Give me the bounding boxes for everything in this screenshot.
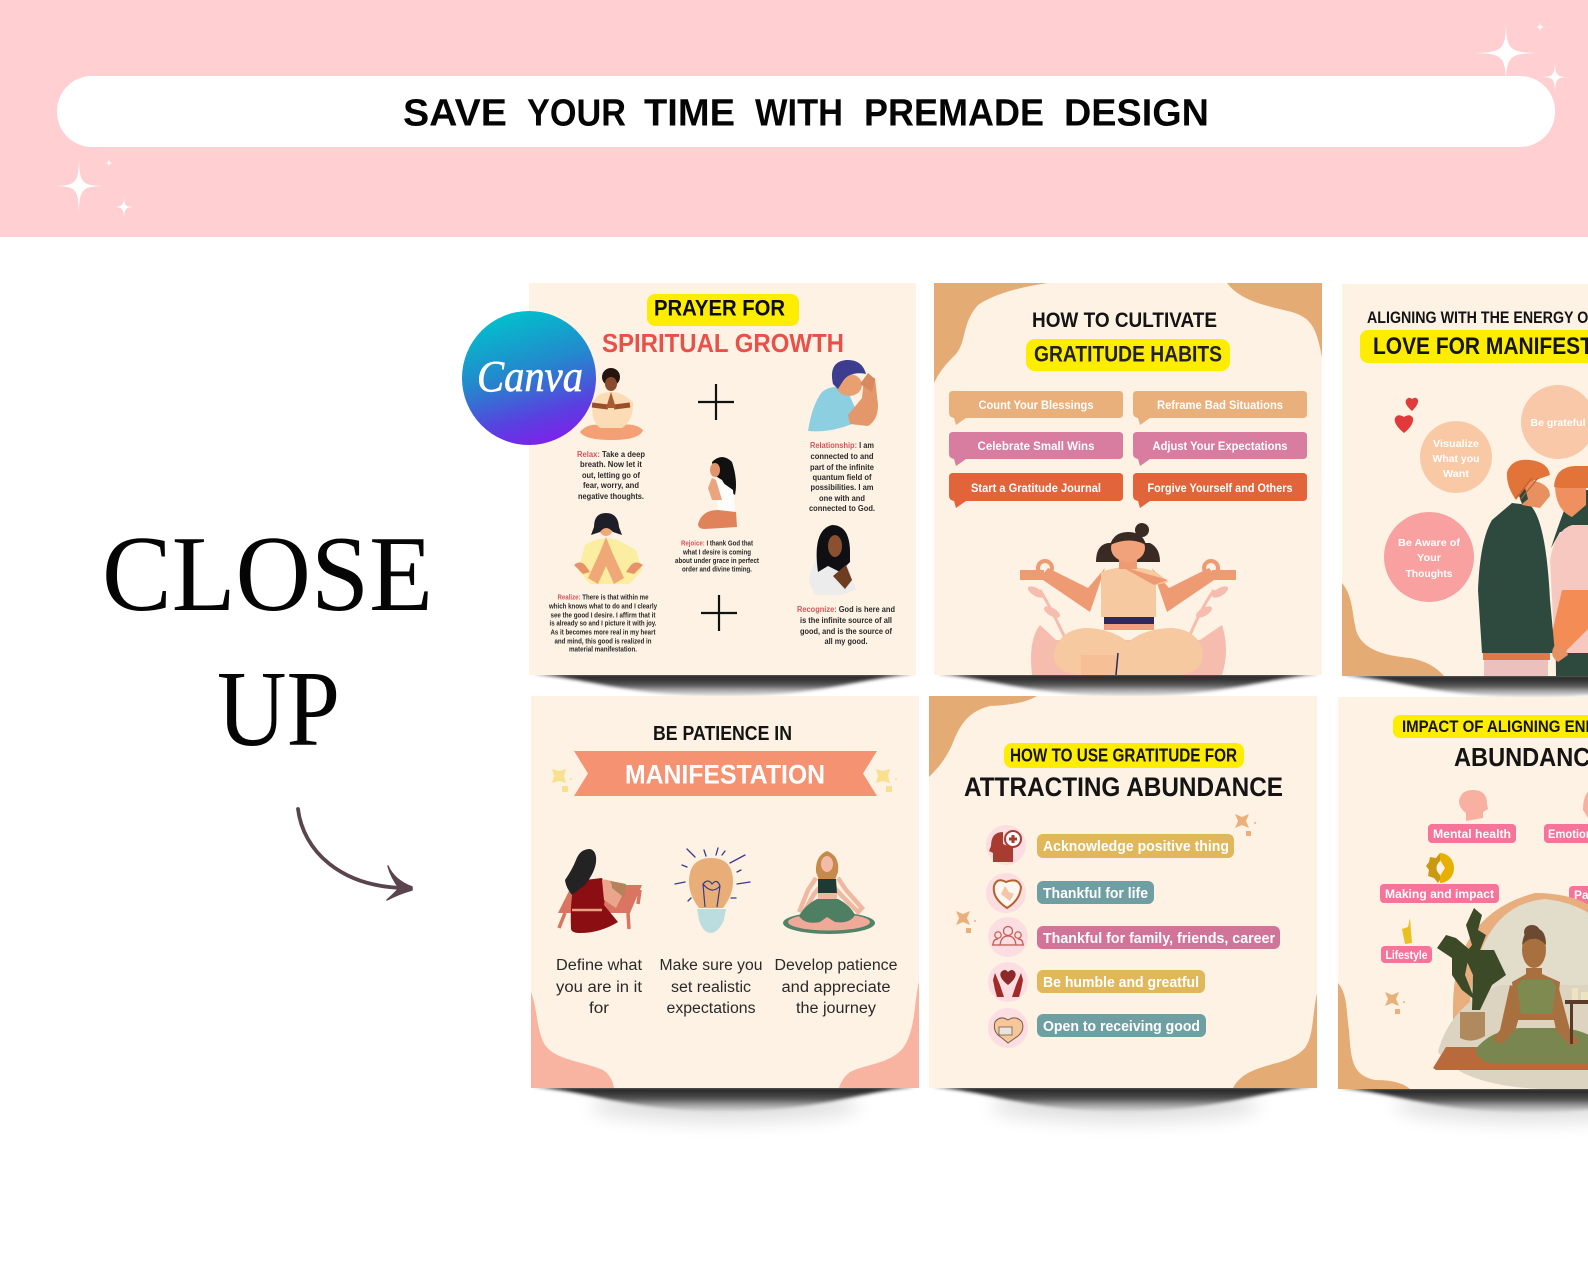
label: making and impact (1380, 884, 1499, 903)
decorative corner blobs (934, 283, 1322, 383)
text: realize: and mind, this good is realized in (554, 636, 652, 646)
speech bubble: celebrate small wins (949, 432, 1123, 466)
heading: close up: CLOSE (102, 515, 433, 634)
panel: impact of aligning energy (1338, 697, 1588, 1089)
panel: gratitude habits (934, 283, 1322, 675)
text: develop patience and appreciate the journey: and appreciate (782, 979, 890, 996)
text: relax: Relax: Take a deep (577, 449, 645, 459)
speech bubble: celebrate small wins: Celebrate Small Wins (978, 441, 1094, 453)
circle: visualize what you want (1420, 421, 1492, 493)
speech bubble: start a gratitude journal (949, 473, 1123, 508)
speech bubble: reframe bad situations: Reframe Bad Situations (1157, 400, 1283, 412)
circle: visualize what you want: What you (1432, 453, 1480, 465)
circle: be aware of your thoughts: Thoughts (1406, 568, 1453, 580)
circle: be aware of your thoughts: Your (1417, 552, 1441, 564)
row: open to receiving good: Open to receiving good (1043, 1019, 1200, 1035)
text: make sure you set realistic expectations (660, 957, 762, 1017)
text: realize: As it becomes more real in my heart (550, 628, 656, 636)
illustration: couple (1478, 460, 1588, 676)
row: thankful for family friends career: Thankful for family, friends, career (1043, 931, 1275, 947)
text: recognize (797, 604, 895, 646)
text: make sure you set realistic expectations: set realistic (671, 979, 751, 996)
circle: be grateful: Be grateful (1530, 417, 1586, 429)
text: recognize: Recognize: God is here and (797, 604, 895, 614)
title text: PREMADE (864, 92, 1044, 134)
plus sign bottom (701, 595, 737, 631)
illustration: woman meditating with plant (1433, 893, 1588, 1089)
decorative corner blobs (929, 696, 1317, 1088)
label: mental health: Mental health (1433, 827, 1511, 841)
icon: head, emotional (1583, 792, 1588, 818)
icon: kneeling woman praying (698, 457, 737, 529)
banner: manifestation (574, 751, 877, 796)
text: define what you are in it for: you are in it (556, 979, 643, 996)
speech bubble: count your blessings: Count Your Blessings (978, 400, 1094, 412)
text: realize: material manifestation. (569, 644, 637, 654)
text: define what you are in it for: for (589, 1000, 609, 1017)
icon: person praying, blue shirt (808, 360, 878, 431)
decorative corner blobs (531, 982, 919, 1088)
text: relationship: one with and (819, 493, 865, 503)
label: making and impact: Making and impact (1385, 887, 1494, 901)
speech bubble: adjust your expectations (1133, 432, 1307, 466)
text: rejoice: what I desire is coming (682, 548, 751, 556)
illustration: meditating woman (1020, 523, 1236, 675)
speech bubble: start a gratitude journal: Start a Gratitude Journal (971, 483, 1101, 495)
title text: WITH (755, 92, 843, 134)
panel: attracting abundance (929, 696, 1317, 1088)
icon: woman hands together, yellow shirt (574, 513, 643, 584)
label: lifestyle: Lifestyle (1386, 950, 1428, 962)
circle: be aware of your thoughts (1384, 512, 1474, 602)
banner: manifestation: MANIFESTATION (625, 760, 825, 790)
text: relationship: quantum field of (812, 472, 872, 482)
text: relationship: Relationship: I am (810, 440, 874, 450)
heading: be patience in: BE PATIENCE IN (653, 723, 792, 745)
decorative corner blob (1338, 983, 1410, 1089)
text: realize: which knows what to do and I clearly (548, 602, 658, 610)
label: lifestyle (1381, 946, 1432, 963)
icon: lifestyle figure (1402, 918, 1412, 944)
text: relationship (809, 440, 875, 513)
text: recognize: is the infinite source of all (800, 615, 892, 625)
text: realize: Realize: There is that within me (558, 592, 648, 602)
title text: YOUR (527, 92, 626, 134)
text: define what you are in it for (556, 957, 643, 1017)
icon: woman with long hair praying (809, 525, 856, 595)
icon: gear (1426, 853, 1454, 883)
heading: attracting abundance: ATTRACTING ABUNDANCE (964, 772, 1283, 802)
text: rejoice: order and divine timing. (682, 564, 752, 574)
text: make sure you set realistic expectations: Make sure you (660, 957, 762, 974)
circle: be grateful (1521, 385, 1588, 459)
decorative corner blob (1342, 583, 1444, 676)
text: develop patience and appreciate the journey (774, 957, 898, 1017)
circle: be aware of your thoughts: Be Aware of (1398, 537, 1461, 549)
title text: DESIGN (1064, 92, 1209, 134)
text: define what you are in it for: Define what (556, 957, 643, 974)
text: relax: breath. Now let it (580, 459, 642, 469)
text: relationship: possibilities. I am (810, 482, 874, 492)
text: relationship: part of the infinite (810, 462, 874, 472)
row: thankful for life: Thankful for life (1043, 886, 1148, 902)
title text: SAVE (403, 92, 507, 134)
panel: prayer for spiritual growth (529, 283, 916, 675)
label: mental health (1428, 824, 1516, 843)
circle: visualize what you want: Visualize (1433, 438, 1479, 450)
plus sign top (698, 384, 734, 420)
canva logo badge (462, 311, 596, 445)
canva logo badge: Canva (477, 352, 583, 401)
row: open to receiving good (988, 1008, 1206, 1048)
label: emotional (1544, 824, 1588, 843)
text: relationship: connected to and (810, 451, 874, 461)
icon: meditating person (580, 368, 643, 440)
icon: woman writing at desk (558, 849, 642, 933)
card shadows (532, 674, 1588, 1122)
panel: be patience in manifestation (531, 696, 919, 1088)
icon: sparkles top right (1464, 15, 1571, 98)
text: relax: fear, worry, and (583, 480, 639, 490)
heading: close up: UP (217, 650, 340, 769)
icon: woman in yoga pose on mat (783, 851, 875, 934)
row: thankful for family friends career (988, 917, 1280, 957)
icon: yellow sparkles right (876, 769, 897, 792)
row: acknowledge positive thing (986, 825, 1234, 865)
speech bubble: adjust your expectations: Adjust Your Expectations (1152, 441, 1288, 453)
icon: light bulb (675, 848, 750, 933)
speech bubble: forgive yourself and others: Forgive Yourself and Others (1148, 483, 1292, 495)
icon: yellow sparkles left (552, 769, 572, 792)
heading highlight: how to use gratitude for: HOW TO USE GRATITUDE FOR (1010, 744, 1237, 766)
text: rejoice: about under grace in perfect (675, 556, 759, 565)
heading: spiritual growth: SPIRITUAL GROWTH (602, 328, 844, 358)
icon: sparkles (956, 814, 1256, 933)
heading highlight: gratitude habits: GRATITUDE HABITS (1034, 342, 1222, 366)
speech bubble: reframe bad situations (1133, 391, 1307, 425)
text: realize (548, 592, 658, 654)
speech bubble: count your blessings (949, 391, 1123, 425)
text: relationship: connected to God. (809, 503, 875, 513)
arrow (298, 809, 412, 900)
text: make sure you set realistic expectations: expectations (666, 1000, 756, 1017)
label: partial right (1569, 886, 1588, 904)
text: recognize: all my good. (824, 636, 868, 646)
panel: love for manifestation (1342, 284, 1588, 676)
text: develop patience and appreciate the journey: the journey (796, 1000, 876, 1017)
heading highlight: prayer for: PRAYER FOR (654, 296, 785, 320)
text: recognize: good, and is the source of (800, 626, 892, 636)
text: develop patience and appreciate the journey: Develop patience (774, 957, 898, 974)
row: be humble and greatful (988, 962, 1205, 1002)
heading: how to cultivate: HOW TO CULTIVATE (1032, 308, 1217, 332)
text: realize: is already so and I picture it with joy. (550, 618, 656, 628)
title text: TIME (644, 92, 735, 134)
text: relax (577, 449, 645, 501)
text: realize: see the good I desire. I affirm that it (550, 610, 656, 620)
row: acknowledge positive thing: Acknowledge positive thing (1043, 839, 1229, 855)
header band (0, 0, 1588, 237)
icon: head, mental health (1459, 790, 1488, 821)
text: rejoice: Rejoice: I thank God that (681, 538, 753, 548)
text: relax: negative thoughts. (578, 491, 644, 501)
text: relax: out, letting go of (582, 470, 640, 480)
row: thankful for life (986, 873, 1154, 913)
icon: sparkle (1385, 992, 1405, 1014)
heading: close up (102, 515, 433, 769)
title pill (57, 76, 1555, 147)
icon: hearts (1395, 398, 1418, 433)
speech bubble: forgive yourself and others (1133, 473, 1307, 508)
icon: sparkles bottom left (48, 150, 137, 222)
circle: visualize what you want: Want (1443, 468, 1470, 480)
text: rejoice (675, 538, 759, 574)
row: be humble and greatful: Be humble and greatful (1043, 975, 1199, 991)
